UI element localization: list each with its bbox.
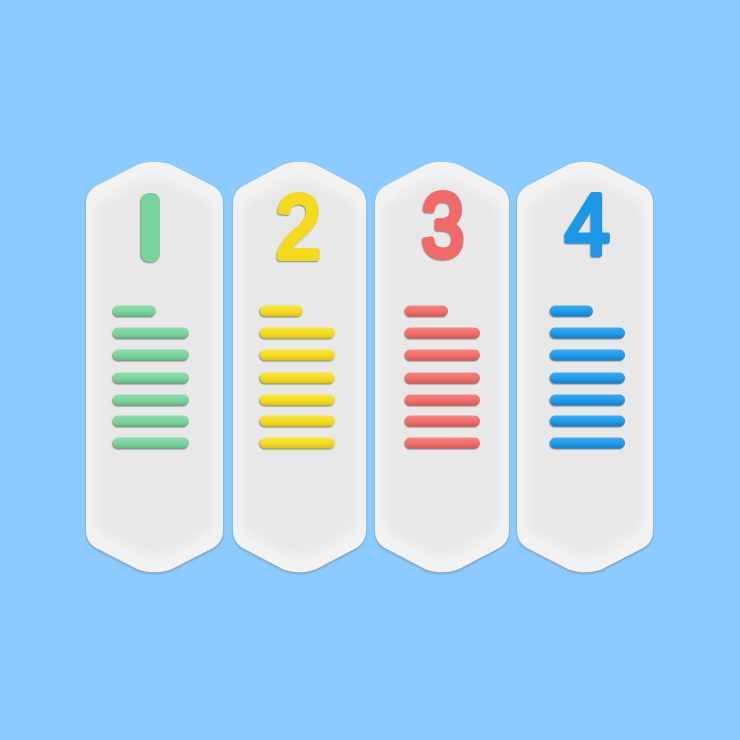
number 1: 1: [143, 195, 158, 263]
panel: step 2: [233, 162, 366, 574]
card 1 body: [86, 162, 223, 574]
number 3: 3: [422, 174, 464, 275]
number 2: 2: [276, 177, 321, 278]
text lines 1: [113, 306, 189, 448]
number 4: 4: [565, 176, 610, 273]
panel: step 4: [517, 162, 653, 574]
text lines 3: [405, 306, 480, 448]
panel: step 3: [375, 162, 509, 574]
text lines 2: [260, 306, 335, 448]
card 2 body: [233, 162, 366, 574]
card 4 body: [517, 162, 653, 574]
card 3 body: [375, 162, 509, 574]
panel: step 1: [86, 162, 223, 574]
text lines 4: [550, 306, 625, 448]
